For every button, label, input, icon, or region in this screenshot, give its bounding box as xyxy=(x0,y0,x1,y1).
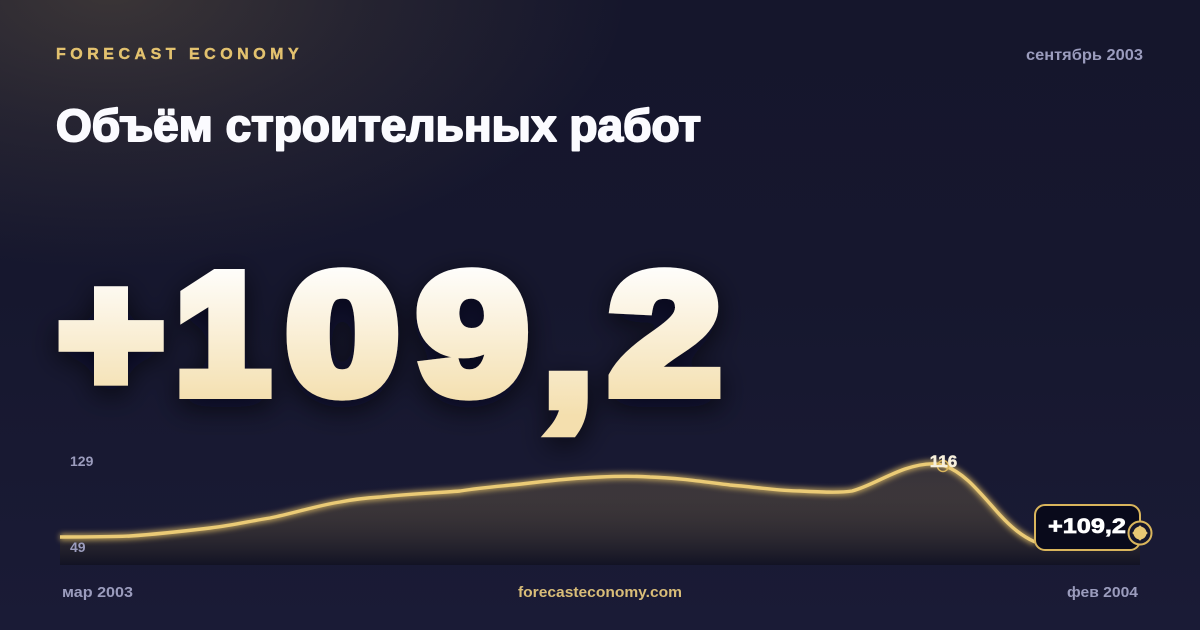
big number: 9 xyxy=(417,240,528,429)
end date: фев 2004 xyxy=(1067,584,1139,601)
chart line xyxy=(60,464,1035,542)
big number: 0 xyxy=(286,239,399,429)
big number: + xyxy=(58,240,164,429)
chart area fill xyxy=(60,464,1140,565)
sparkline chart xyxy=(60,452,1152,565)
peak label: 116 xyxy=(930,452,957,471)
chart line glow xyxy=(60,464,1035,542)
peak marker xyxy=(938,460,948,472)
website: forecasteconomy.com xyxy=(518,584,682,601)
value callout: +109,2 xyxy=(1048,515,1126,538)
title: Объём строительных работ xyxy=(56,100,701,151)
axis max label: 129 xyxy=(70,453,94,469)
date label: сентябрь 2003 xyxy=(1026,47,1143,64)
big number: 1 xyxy=(175,240,270,430)
big number: 2 xyxy=(609,240,721,429)
axis min label: 49 xyxy=(70,539,86,555)
end marker xyxy=(1128,522,1152,544)
big number: , xyxy=(543,246,593,441)
value callout xyxy=(1035,505,1140,550)
brand label: FORECAST ECONOMY xyxy=(56,46,303,63)
big number xyxy=(58,239,721,441)
start date: мар 2003 xyxy=(62,584,133,601)
